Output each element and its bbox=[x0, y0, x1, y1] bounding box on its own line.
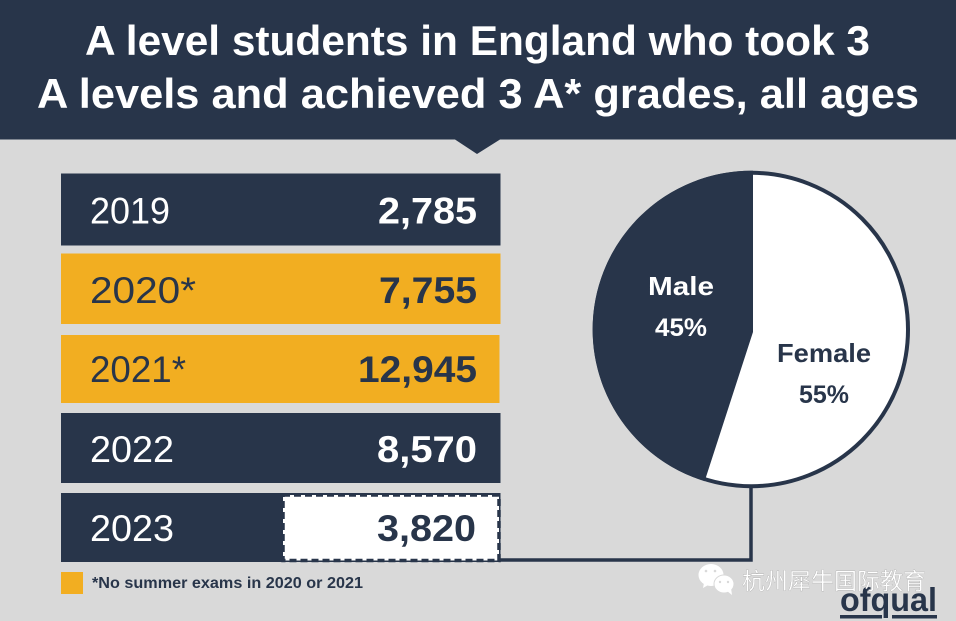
table row: 2022: 8,570 bbox=[377, 429, 477, 470]
title banner bbox=[0, 0, 956, 154]
table row: 2020: 2020* bbox=[90, 270, 196, 311]
table row: 2020: 7,755 bbox=[379, 270, 477, 311]
table row: 2019: 2019 bbox=[90, 190, 170, 232]
watermark: WeChat icon and account name: 杭州犀牛国际教育 bbox=[742, 562, 926, 596]
table row: 2021: 2021* bbox=[90, 349, 186, 390]
highlighted 2023 value: 3,820 bbox=[377, 508, 476, 549]
legend bbox=[61, 572, 363, 594]
ofqual logo: ofqual bbox=[840, 581, 937, 618]
icon: WeChat bubbles bbox=[698, 564, 734, 595]
legend: *No summer exams in 2020 or 2021 bbox=[92, 575, 363, 592]
pie slice: male bbox=[593, 171, 753, 481]
label: female bbox=[777, 338, 871, 409]
table row: 2019: 2,785 bbox=[378, 190, 477, 232]
label: female: Female bbox=[777, 338, 871, 368]
label: male bbox=[648, 271, 714, 342]
table row: 2022: 2022 bbox=[90, 429, 174, 470]
label: male: Male bbox=[648, 271, 714, 301]
pie chart: gender split bbox=[593, 171, 908, 486]
table row: 2021: 12,945 bbox=[358, 349, 477, 390]
table row: 2019 bbox=[61, 174, 500, 246]
table row: 2020 bbox=[61, 254, 500, 324]
highlighted 2023 value bbox=[283, 495, 499, 560]
title: A levels and achieved 3 A* grades, all ages bbox=[37, 70, 919, 117]
table row: 2021 bbox=[61, 335, 500, 403]
table row: 2023: 2023 bbox=[90, 508, 174, 549]
label: male: 45% bbox=[655, 314, 707, 342]
connector line from 2023 to pie chart bbox=[500, 487, 751, 560]
title bbox=[37, 17, 919, 117]
table row: 2022 bbox=[61, 413, 500, 483]
table row: 2023 bbox=[61, 493, 500, 562]
title: A level students in England who took 3 bbox=[85, 17, 870, 64]
label: female: 55% bbox=[799, 381, 849, 409]
